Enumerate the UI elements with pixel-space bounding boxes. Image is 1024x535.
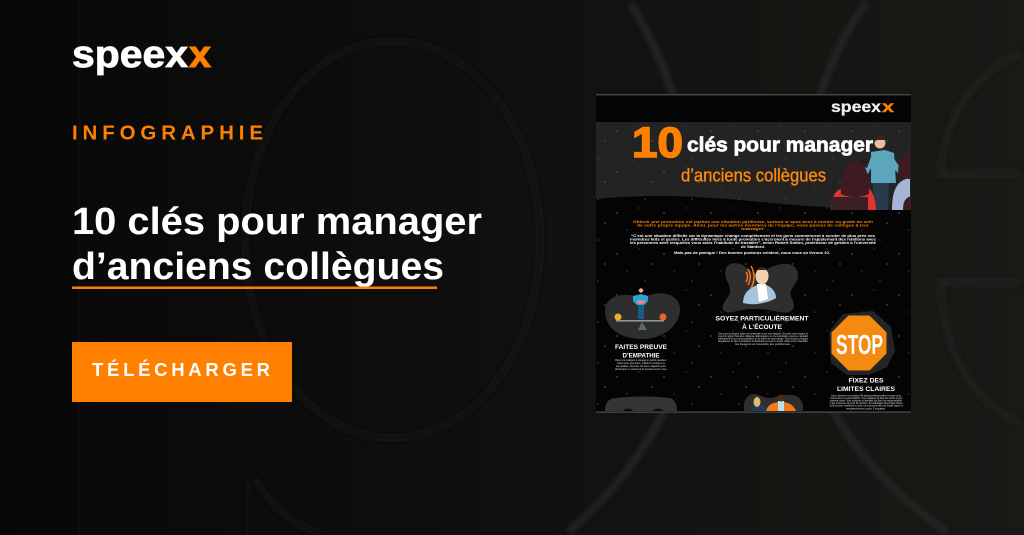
tip heading: À L’ÉCOUTE <box>742 323 782 331</box>
tip cut off: left illustration <box>605 396 677 411</box>
intro: highlighted paragraph <box>633 219 874 231</box>
tip heading <box>615 344 667 360</box>
tip text: régulières et des entretiens individuels peuvent rester utiles pour identifier <box>718 339 808 343</box>
tip text <box>718 332 809 346</box>
icon: stop sign: STOP <box>836 329 883 360</box>
infographic preview <box>596 94 911 413</box>
button: télécharger <box>72 342 292 402</box>
intro: quote paragraph: Mais pas de panique ! Des bonnes postures existent, nous vous en livrons 10. <box>674 250 830 255</box>
main heading: 10 clés pour manager <box>72 201 482 243</box>
tip text: soyez de garde d’anciens collègues. Encouragez une communication ouverte et écoutez <box>718 334 809 338</box>
main heading: d’anciens collègues <box>72 246 444 288</box>
intro: highlighted paragraph: Obtenir une promotion est parfois une situation périlleuse, surtout si vous avez à monter en grade au sein <box>633 219 874 224</box>
preview title: d’anciens collègues <box>681 164 826 186</box>
tip text: et les processus de prise de décision. En établissant des limites claires <box>830 401 903 405</box>
tip heading: FIXEZ DES <box>848 378 884 384</box>
logo: speexx: speex <box>72 34 188 76</box>
intro: quote paragraph: les personnes avec lesquelles vous aviez l’habitude de travailler”, selon Robert Sutton, professeur de gestion à l’université <box>630 240 877 245</box>
tip heading <box>837 378 895 393</box>
tip text: sympathie, discutez de leurs objectifs pour <box>616 364 666 368</box>
tip heading: D’EMPATHIE <box>622 352 660 360</box>
heading underline <box>72 286 437 289</box>
tip text: attentes claires. Vous expliquez et identifiez les rôles, les responsabilités <box>830 398 903 402</box>
logo: speexx: x <box>189 34 211 76</box>
tip text: Vous maintenez vos relations de travail professionnelles et restez amis <box>831 394 902 398</box>
eyebrow label: INFOGRAPHIE <box>72 122 263 144</box>
tip text: Placez vos collègues à manager en parfois pareilleux. <box>615 358 667 362</box>
woman seen from behind, left <box>830 161 876 210</box>
preview title: clés pour manager <box>687 134 873 156</box>
main heading <box>72 201 482 288</box>
tip text: les besoins et résoudre les problèmes. <box>735 342 791 346</box>
tip text: vous pouvez contribuer à créer un environnement de travail digne et <box>830 404 903 408</box>
tip text: concernant vos responsabilités. Vous expliquez de faire des tâches et des <box>830 396 903 400</box>
speaker <box>855 136 910 210</box>
intro: quote paragraph: moindres faits et gestes. Les difficultés liées à toute promotion s’accroient à mesure de l’ajustement des relations avec <box>630 237 877 242</box>
preview background <box>596 94 911 413</box>
woman seen from behind, right <box>892 153 911 210</box>
illustration: audience and speaker <box>830 136 911 210</box>
tip: faites preuve d'empathie <box>605 288 680 371</box>
intro: highlighted paragraph: de votre propre équipe. Ainsi, pour les autres membres de l’équipe, vous passez de collègue à leur <box>637 223 870 228</box>
tip heading: FAITES PREUVE <box>615 344 667 351</box>
intro: highlighted paragraph: manager. <box>741 226 765 231</box>
tip heading: SOYEZ PARTICULIÈREMENT <box>716 314 809 322</box>
intro: quote paragraph: de Stanford. <box>741 244 765 249</box>
intro: quote paragraph <box>630 233 877 255</box>
tip heading: LIMITES CLAIRES <box>837 386 895 393</box>
tip text: Faites toute promotion, instaurez confiance et <box>617 361 665 365</box>
tip text: respectueux pour l’équipe. <box>846 406 886 410</box>
preview title: 10 <box>632 119 683 167</box>
tip heading <box>716 314 809 331</box>
tip cut off: centre illustration <box>744 394 803 411</box>
icon: listening man <box>722 263 798 313</box>
preview logo: speex <box>831 99 881 116</box>
icon: balance <box>605 288 680 339</box>
tip text: développer un sentiment de loyauté envers vous. <box>615 367 667 371</box>
tip text: attentivement leurs préoccupations et les idées de votre équipe. Des réunions d’équipe <box>718 336 809 340</box>
preview logo: x <box>882 99 894 116</box>
tip text <box>615 358 667 371</box>
preview title <box>632 119 873 186</box>
tip text <box>830 394 903 410</box>
tip: soyez particulièrement à l'écoute <box>716 263 809 346</box>
button: télécharger: TÉLÉCHARGER <box>92 359 270 380</box>
intro: quote paragraph: “C’est une situation difficile car la dynamique change complètement et les gens commencent à scruter de plus près vos <box>631 233 875 238</box>
tip text: Une communication claire est nécessaire pour vos relations. Ecoutez votre équipe et <box>718 332 808 336</box>
tip: fixez des limites claires <box>829 311 903 410</box>
